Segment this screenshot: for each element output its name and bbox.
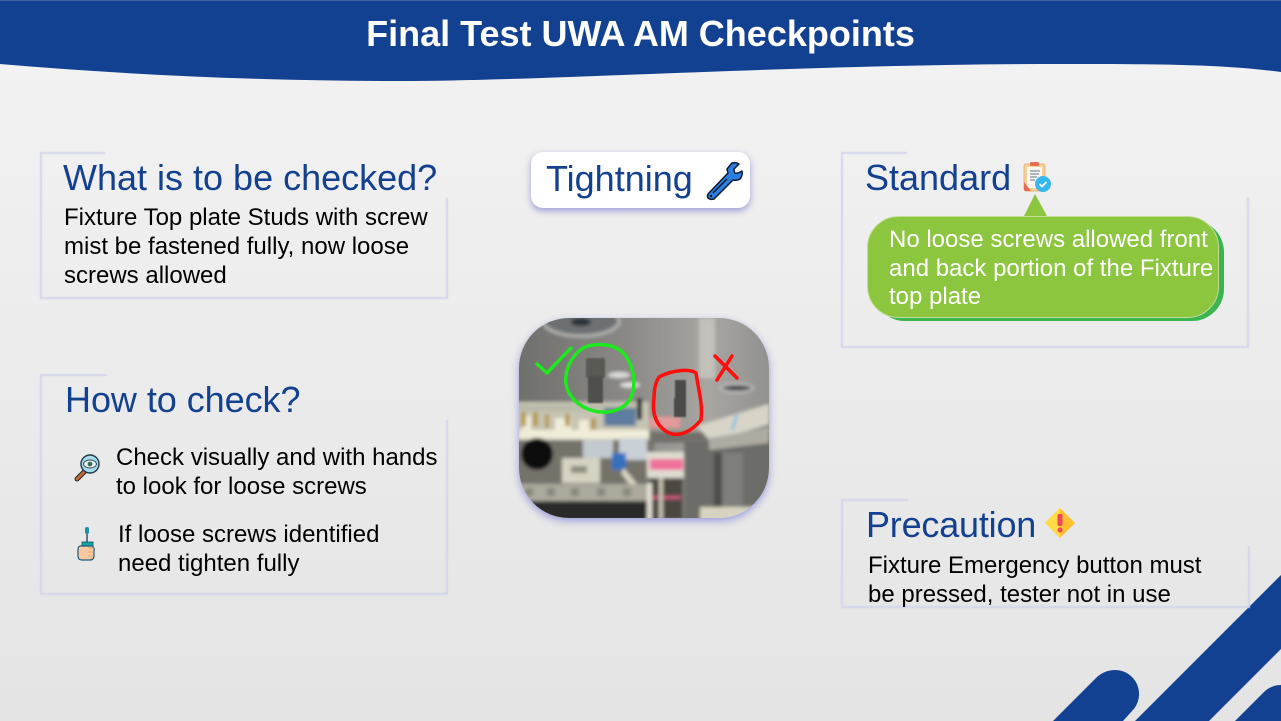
heading: what is to be checked: What is to be checked? (63, 157, 437, 198)
text: standard: top plate (889, 283, 981, 310)
panel: how to check (40, 374, 448, 595)
text: standard (889, 226, 1213, 310)
header band (0, 0, 1281, 81)
text: what is to be checked: screws allowed (64, 262, 227, 289)
icon: checklist (1024, 162, 1051, 192)
text: what is to be checked: mist be fastened fully, now loose (64, 233, 409, 260)
icon: magnifier with eye (74, 454, 100, 482)
bench (514, 402, 649, 440)
right side (684, 443, 774, 523)
heading: precaution: Precaution (866, 504, 1036, 545)
text: standard: and back portion of the Fixture (889, 254, 1213, 282)
panel: precaution (841, 499, 1251, 609)
text: tighten fully: need tighten fully (118, 550, 299, 577)
text: tighten fully (118, 521, 379, 577)
heading: standard: Standard (865, 157, 1011, 198)
title: Final Test UWA AM Checkpoints (366, 13, 915, 54)
photo: fixture studs with annotations (519, 318, 769, 518)
text: what is to be checked: Fixture Top plate Studs with screw (64, 204, 428, 231)
heading: how to check: How to check? (65, 379, 300, 420)
text: precaution: Fixture Emergency button must (868, 552, 1201, 579)
corner decoration (1053, 575, 1281, 721)
text: precaution: be pressed, tester not in use (868, 581, 1171, 608)
text: check visually (116, 444, 438, 500)
text: check visually: to look for loose screws (116, 473, 367, 500)
green check and circle (537, 345, 634, 412)
text: check visually: Check visually and with hands (116, 444, 438, 471)
pink block (647, 452, 684, 478)
panel: what is to be checked (40, 152, 448, 299)
heading: tightning: Tightning (546, 158, 693, 199)
icon: hand with screwdriver (77, 527, 95, 561)
callout: standard (867, 194, 1224, 321)
label: tightning (531, 152, 750, 208)
red cross and circle (653, 356, 737, 434)
lower left machinery (524, 440, 655, 485)
icon: wrench (706, 162, 743, 200)
text: tighten fully: If loose screws identified (118, 521, 379, 548)
studs (586, 358, 686, 417)
text: what is to be checked (64, 204, 428, 289)
text: precaution (868, 552, 1202, 608)
icon: warning diamond (1045, 508, 1075, 538)
text: standard: No loose screws allowed front (889, 226, 1208, 253)
panel: standard (841, 152, 1249, 348)
